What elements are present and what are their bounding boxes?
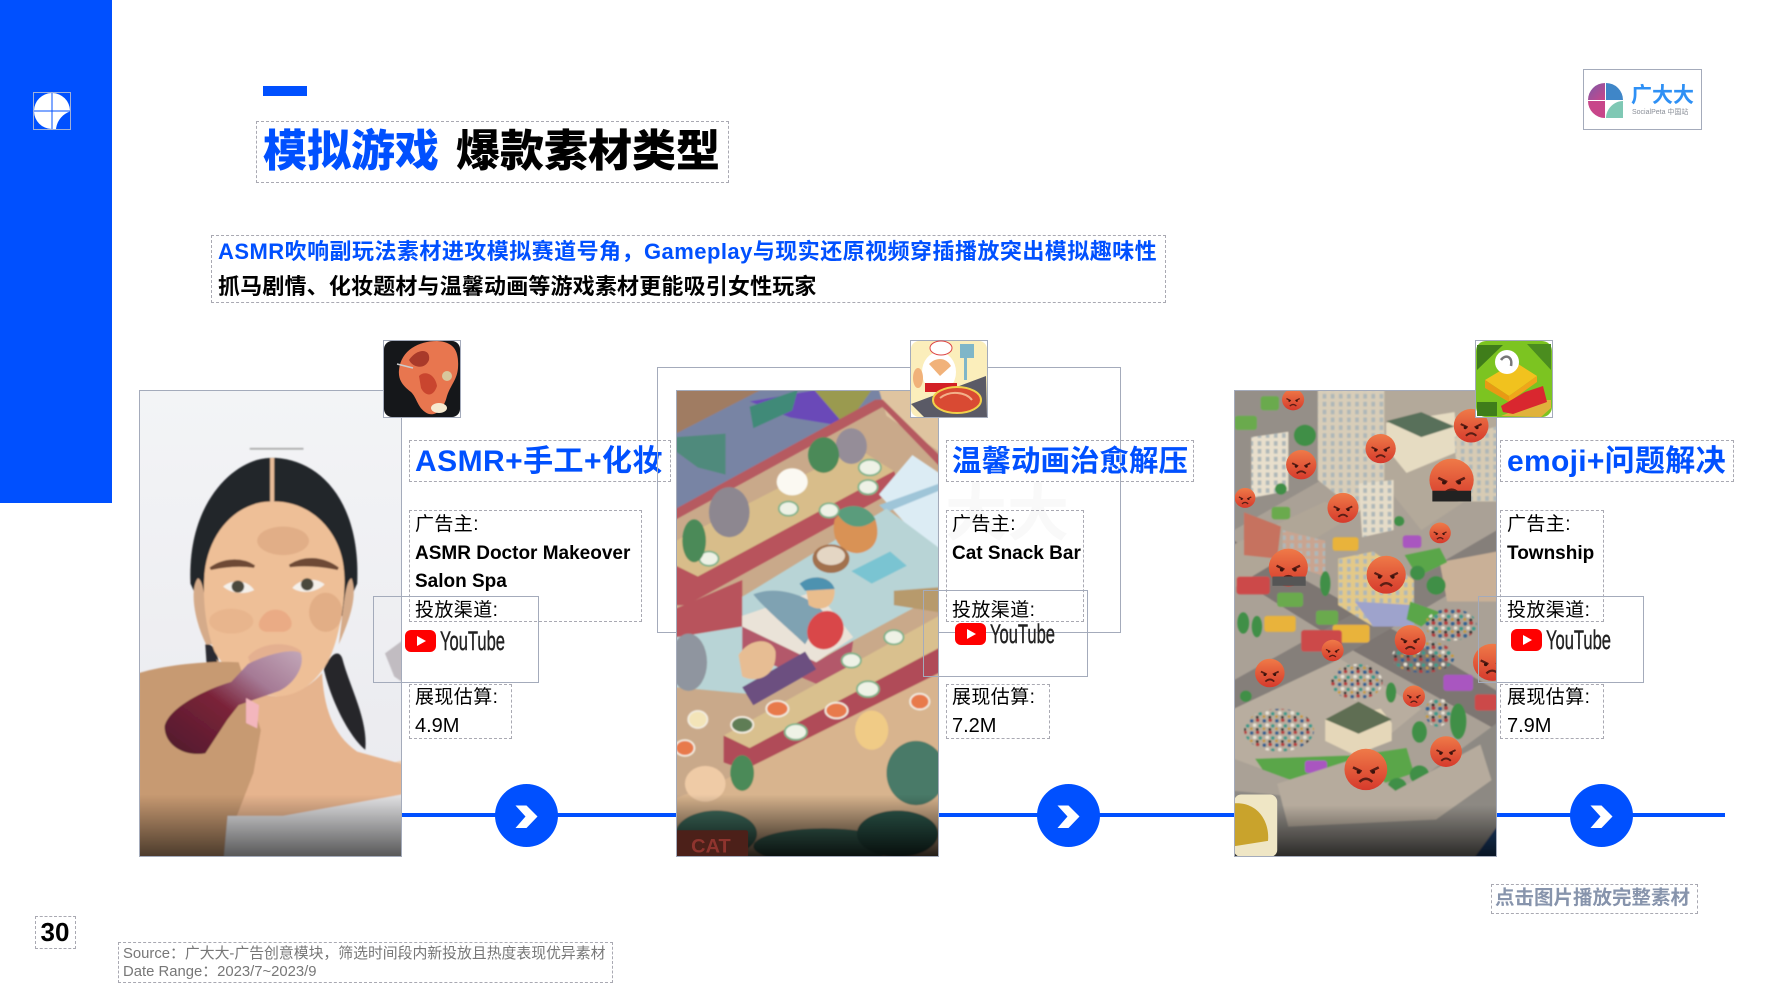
block: advertiser: Cat Snack Bar	[952, 543, 1081, 564]
block: advertiser	[946, 510, 1084, 622]
sidebar band	[0, 0, 112, 503]
block: advertiser: 广告主:	[1507, 514, 1571, 535]
block: advertiser	[1500, 510, 1604, 622]
block: estimated impressions	[946, 684, 1050, 739]
block: estimated impressions	[1500, 684, 1604, 739]
block: estimated impressions: 展现估算:	[415, 687, 498, 708]
block: advertiser: Township	[1507, 543, 1594, 564]
title: 模拟游戏 爆款素材类型	[263, 127, 720, 176]
block: advertiser: 投放渠道:	[1507, 600, 1590, 621]
arrow button 1	[495, 784, 558, 847]
source note: Source：广大大-广告创意模块，筛选时间段内新投放且热度表现优异素材	[123, 946, 605, 962]
image outline	[139, 390, 402, 857]
block: estimated impressions	[409, 684, 512, 739]
caption: click to play	[1491, 884, 1698, 914]
block: advertiser: Salon Spa	[415, 571, 507, 592]
icon: ear game	[383, 340, 461, 418]
block: estimated impressions: 展现估算:	[952, 687, 1035, 708]
block: estimated impressions: 展现估算:	[1507, 687, 1590, 708]
block: advertiser: 投放渠道:	[952, 600, 1035, 621]
channel: YouTube	[923, 590, 1088, 677]
logo: SocialPeta: 广大大	[1631, 84, 1694, 107]
block: estimated impressions: 7.2M	[952, 715, 996, 737]
panel: cozy animation creative	[657, 340, 1194, 857]
heading: emoji+问题解决: emoji+问题解决	[1507, 445, 1726, 478]
channel: YouTube	[373, 596, 539, 683]
logo: SocialPeta	[1583, 69, 1702, 130]
source note: Date Range：2023/7~2023/9	[123, 964, 317, 980]
page number	[35, 916, 76, 949]
panel: emoji problem-solving creative	[1234, 340, 1734, 857]
block: advertiser: 广告主:	[415, 514, 479, 535]
source note	[118, 942, 613, 983]
title accent bar	[263, 86, 307, 96]
block: advertiser: 投放渠道:	[415, 600, 498, 621]
block: advertiser	[409, 510, 642, 622]
image: cat restaurant scene	[677, 391, 938, 857]
subtitle text block: ASMR吹响副玩法素材进攻模拟赛道号角，Gameplay与现实还原视频穿插播放突出模拟趣味性	[218, 239, 1157, 264]
faint watermark: 大大	[945, 480, 1069, 549]
panel: ASMR makeup creative	[139, 340, 671, 857]
timeline line	[401, 813, 1725, 817]
block: advertiser: 广告主:	[952, 514, 1016, 535]
page number: 30	[41, 917, 69, 947]
caption: click to play: 点击图片播放完整素材	[1495, 887, 1690, 909]
icon: sidebar logo	[33, 92, 71, 130]
image: makeup video still	[140, 391, 401, 856]
block: estimated impressions: 4.9M	[415, 715, 459, 737]
heading: 温馨动画治愈解压: 温馨动画治愈解压	[952, 445, 1188, 478]
heading: ASMR+手工+化妆: ASMR+手工+化妆	[415, 445, 663, 478]
arrow button 3	[1570, 784, 1633, 847]
subtitle text block	[211, 235, 1166, 303]
logo: SocialPeta: SocialPeta 中国站	[1632, 109, 1688, 116]
image: city crowd with angry emojis	[1235, 391, 1496, 856]
icon: cat chef	[910, 340, 988, 418]
subtitle text block: 抓马剧情、化妆题材与温馨动画等游戏素材更能吸引女性玩家	[218, 274, 817, 299]
channel: YouTube	[1478, 596, 1644, 683]
outline box	[657, 367, 1121, 633]
image: cat restaurant scene: CAT	[691, 836, 731, 857]
block: estimated impressions: 7.9M	[1507, 715, 1551, 737]
arrow button 2	[1037, 784, 1100, 847]
block: advertiser: ASMR Doctor Makeover	[415, 543, 630, 564]
image outline	[1234, 390, 1497, 857]
image outline	[676, 390, 939, 857]
icon: Township farm	[1475, 340, 1553, 418]
